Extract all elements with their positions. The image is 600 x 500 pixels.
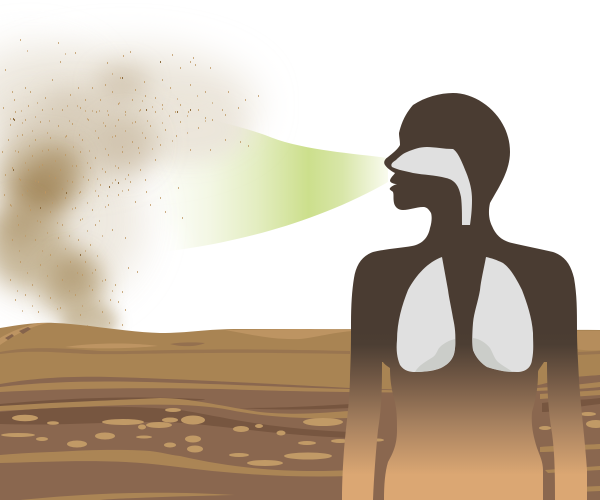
deep brown soil — [0, 375, 600, 500]
dark dust core — [2, 149, 88, 290]
green inhaled air stream — [130, 118, 388, 255]
nasal passage and windpipe — [391, 147, 472, 225]
right lung — [472, 257, 533, 372]
human silhouette — [342, 93, 587, 500]
right lung shading — [473, 338, 513, 372]
surface shadows — [0, 348, 350, 354]
dust speckles — [2, 40, 259, 326]
top soil — [0, 323, 600, 500]
left lung shading — [415, 339, 455, 372]
dark band 2 — [0, 398, 205, 406]
sand pebbles — [1, 408, 600, 466]
dark band 3 — [0, 407, 350, 438]
right soil bands — [540, 390, 600, 399]
left lung — [397, 257, 455, 372]
light band 3 — [0, 451, 350, 477]
surface highlights — [0, 323, 48, 345]
light band 1 — [0, 382, 600, 393]
body — [342, 93, 587, 500]
mid tone haze — [0, 65, 153, 176]
dust cloud — [0, 40, 259, 342]
pale outer haze — [0, 45, 255, 305]
white haze — [80, 210, 180, 300]
ground: soil layers — [0, 323, 600, 500]
light band 2 — [0, 398, 350, 418]
